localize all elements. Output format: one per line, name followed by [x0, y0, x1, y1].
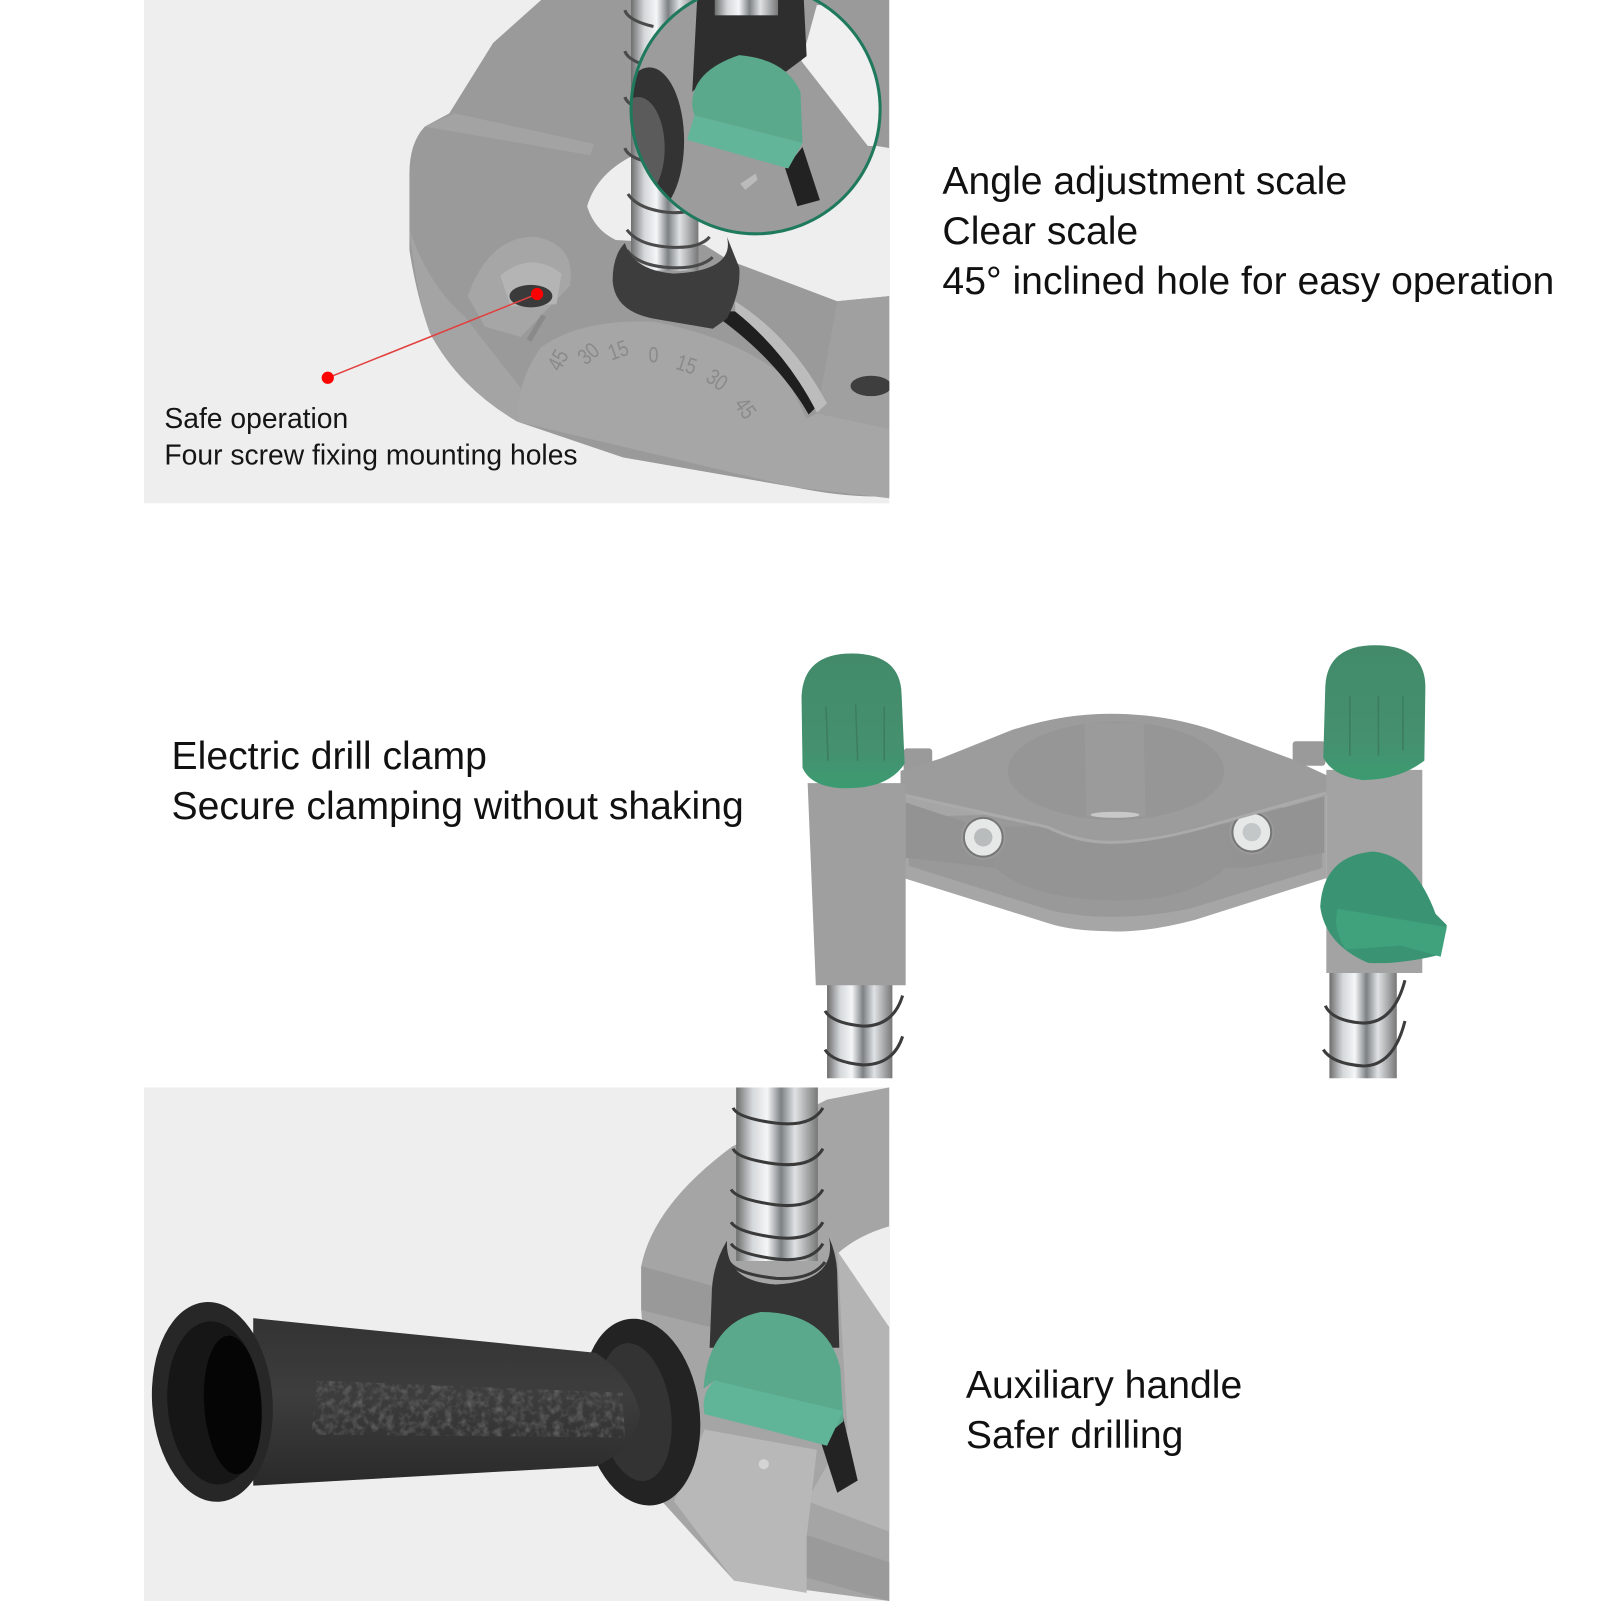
grip body	[253, 1318, 640, 1486]
right part of plate	[807, 1251, 889, 1532]
text: angle adjustment scale: Clear scale	[942, 210, 1138, 253]
clamp opening	[1008, 722, 1224, 820]
gray base plate	[641, 1087, 889, 1601]
upper crease	[425, 113, 594, 155]
top face rim	[901, 792, 1328, 842]
text: auxiliary handle	[966, 1364, 1242, 1457]
right chrome rod	[1329, 970, 1397, 1082]
clamp top face	[900, 714, 1326, 826]
left flange	[145, 1298, 279, 1506]
opening highlight	[1084, 723, 1146, 817]
spring	[729, 1108, 825, 1279]
green knob bar	[704, 1380, 843, 1446]
slot	[817, 1414, 858, 1493]
detail slot	[785, 147, 820, 206]
lower ledge	[796, 1532, 889, 1601]
right green cap	[1323, 645, 1425, 780]
black collar	[710, 1238, 839, 1348]
right green knob	[1320, 852, 1447, 963]
drill clamp illustration	[802, 645, 1447, 1082]
screws	[963, 814, 1272, 858]
scale numbers: 45	[729, 394, 760, 424]
callout text	[164, 402, 578, 471]
left chrome rod	[827, 980, 892, 1082]
text: electric drill clamp: Secure clamping without shaking	[172, 785, 744, 828]
bore rim	[162, 1318, 267, 1488]
left recess	[906, 802, 946, 858]
scale numbers: 30	[701, 365, 732, 396]
notch	[759, 1459, 769, 1469]
text: angle adjustment scale: 45° inclined hole for easy operation	[942, 260, 1554, 303]
base side wall shading	[409, 230, 521, 422]
clamp lower plate	[901, 790, 1326, 931]
right lug and screw hole	[838, 296, 890, 429]
callout text: Four screw fixing mounting holes	[164, 439, 578, 471]
scale numbers: 15	[673, 351, 699, 380]
panel: auxiliary handle	[144, 1087, 889, 1601]
screw mounting hole	[468, 237, 571, 342]
centre opening	[837, 1226, 889, 1327]
detail rod	[715, 0, 778, 15]
panel background	[144, 0, 889, 503]
detail handle disc	[633, 67, 684, 198]
callout text: Safe operation	[164, 402, 348, 434]
black collar	[613, 237, 739, 329]
scale numbers: 45	[543, 346, 574, 375]
scale dome	[518, 321, 889, 498]
opening bottom glint	[1090, 812, 1139, 818]
bore	[199, 1334, 266, 1476]
small top tabs	[904, 741, 1325, 773]
left crease	[641, 1266, 715, 1327]
right flange inner	[590, 1338, 680, 1486]
left green cap	[802, 653, 905, 788]
text: angle adjustment scale: Angle adjustment scale	[942, 160, 1347, 203]
scale numbers	[549, 340, 756, 418]
detail knob dome	[692, 55, 803, 143]
springs	[825, 980, 1405, 1066]
handle	[145, 1298, 712, 1513]
black slot	[723, 311, 815, 414]
right recess	[1286, 796, 1324, 853]
text: electric drill clamp	[172, 735, 744, 828]
panel background	[144, 1087, 889, 1601]
text: angle adjustment scale	[942, 160, 1554, 303]
text: electric drill clamp: Electric drill clamp	[172, 735, 487, 778]
detail opening	[802, 5, 882, 146]
magnified detail circle	[612, 0, 883, 237]
spring	[625, 10, 713, 268]
callout pointer	[322, 288, 543, 384]
centre opening	[587, 143, 889, 301]
gray base plate	[409, 0, 889, 497]
detail knob bar	[687, 115, 803, 168]
detail ring	[631, 0, 880, 234]
slot rim	[735, 301, 827, 413]
chrome rod	[631, 0, 698, 271]
grip texture	[311, 1380, 625, 1438]
lighter lower plate	[674, 1429, 817, 1593]
left post	[808, 783, 906, 985]
text: auxiliary handle: Safer drilling	[966, 1414, 1183, 1457]
detail collar	[692, 0, 807, 92]
panel: mounting base and scale	[144, 0, 891, 503]
green knob dome	[704, 1312, 843, 1440]
right flange	[571, 1311, 712, 1513]
scale numbers: 30	[574, 339, 604, 370]
right post	[1326, 770, 1422, 973]
detail notch	[740, 174, 758, 190]
scale numbers: 0	[648, 344, 658, 368]
lower plate inner	[909, 807, 1322, 917]
clamp tube	[993, 822, 1225, 901]
detail background	[639, 1, 873, 232]
scale numbers: 15	[605, 336, 632, 366]
chrome rod	[736, 1087, 818, 1261]
text: auxiliary handle: Auxiliary handle	[966, 1364, 1242, 1407]
